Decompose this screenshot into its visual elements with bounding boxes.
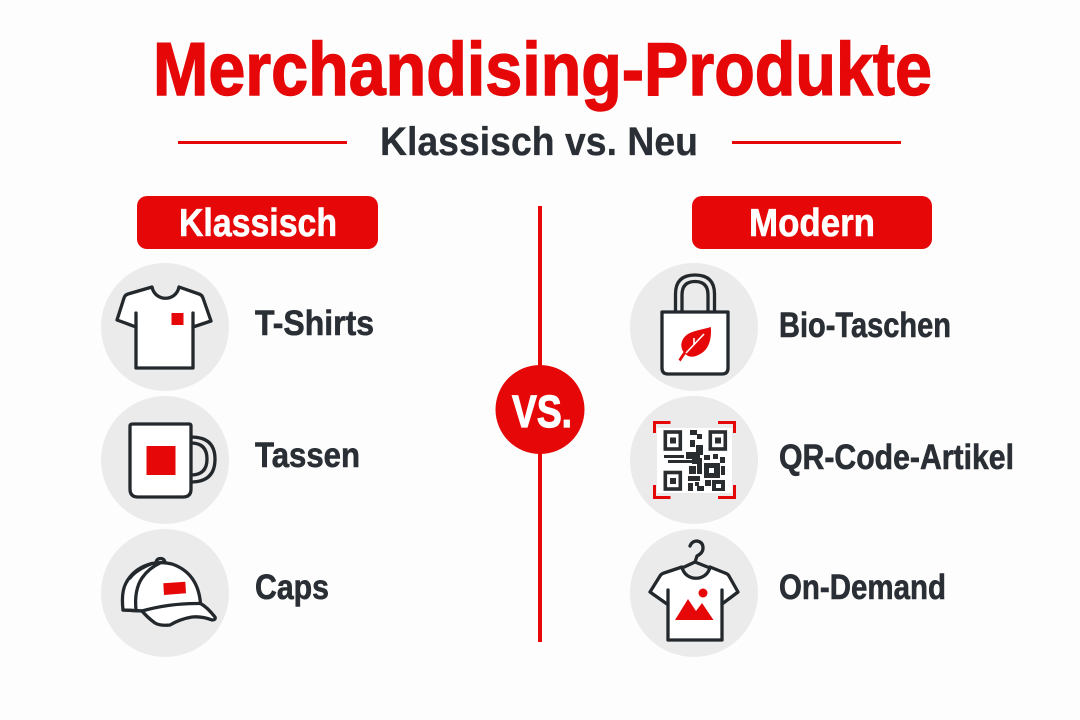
heading: modern: [692, 196, 932, 249]
icon: mug: [130, 424, 215, 497]
icon: t-shirt: [117, 287, 211, 368]
subtitle: Klassisch vs. Neu: [380, 120, 698, 164]
vs badge: VS.: [512, 386, 572, 437]
item: t-shirts: T-Shirts: [255, 304, 374, 343]
heading: klassisch: Klassisch: [179, 202, 337, 245]
heading: klassisch: [137, 196, 378, 249]
icon: qr code: [654, 422, 734, 498]
item: qr-code-artikel: [630, 396, 1014, 524]
item: t-shirts: [101, 263, 374, 391]
subtitle: [178, 120, 901, 164]
heading: modern: Modern: [749, 202, 875, 245]
icon: hanger t-shirt: [650, 541, 738, 640]
icon: tote bag: [662, 275, 728, 374]
item: bio-taschen: Bio-Taschen: [779, 306, 951, 345]
item: tassen: [101, 396, 360, 524]
panel: modern: [630, 196, 1014, 657]
panel: klassisch: [101, 196, 378, 657]
title: Merchandising-Produkte: [153, 27, 932, 111]
vs badge: [496, 365, 584, 454]
item: caps: Caps: [255, 568, 329, 607]
item: bio-taschen: [630, 263, 951, 391]
item: caps: [101, 529, 329, 657]
item: on-demand: On-Demand: [779, 568, 946, 607]
item: qr-code-artikel: QR-Code-Artikel: [779, 438, 1014, 477]
icon: cap: [122, 558, 215, 625]
item: tassen: Tassen: [255, 436, 360, 475]
item: on-demand: [630, 529, 946, 657]
center divider: [538, 206, 542, 642]
